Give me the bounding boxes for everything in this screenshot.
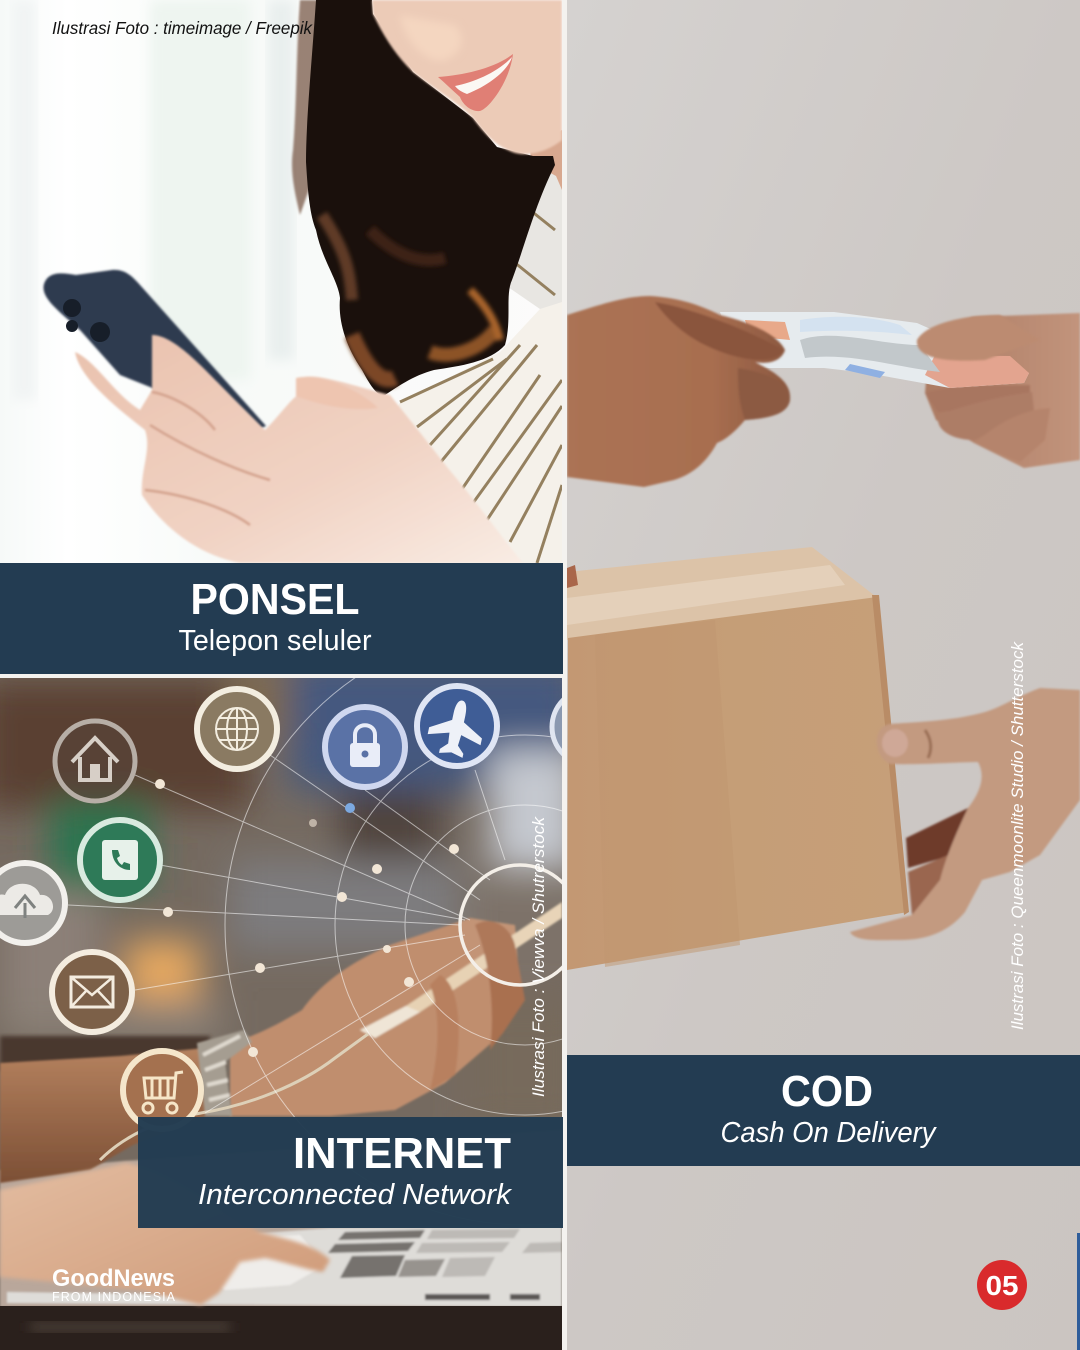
page number badge: 05 xyxy=(986,1270,1018,1301)
wall background xyxy=(567,0,1080,1350)
banknote xyxy=(720,312,1029,388)
icon: home xyxy=(55,721,135,801)
icon: airplane xyxy=(417,686,497,766)
icon: envelope xyxy=(52,952,132,1032)
subheading: telepon seluler: Telepon seluler xyxy=(178,625,372,657)
edge accent xyxy=(1077,1233,1080,1350)
icon: lock xyxy=(325,707,405,787)
table bottom xyxy=(0,1306,562,1350)
subheading: interconnected network: Interconnected Network xyxy=(198,1179,513,1211)
face xyxy=(372,0,562,154)
network lines and rings xyxy=(68,678,562,1117)
panel: ponsel photo xyxy=(0,0,562,563)
icon: shopping cart xyxy=(123,1051,201,1129)
hair xyxy=(306,0,555,395)
icon: phonebook xyxy=(80,820,160,900)
hair wisps xyxy=(292,0,318,215)
icon: globe xyxy=(197,689,277,769)
right thumb on money xyxy=(916,314,1003,362)
page number badge xyxy=(977,1260,1027,1310)
blurred photo background xyxy=(0,678,562,1306)
label: ponsel xyxy=(0,563,563,674)
panel: cod photo xyxy=(567,0,1080,1350)
icon: cloud upload xyxy=(0,863,65,943)
lower hand xyxy=(0,1163,330,1305)
nose shadow xyxy=(406,20,458,57)
photo background: bright window xyxy=(0,0,562,563)
watch xyxy=(197,1030,252,1116)
forearm left xyxy=(0,1048,215,1183)
photo credit: cod: Ilustrasi Foto : Queenmoonlite Studio / Shutterstock xyxy=(1008,641,1027,1030)
photo credit: internet: Ilustrasi Foto : Viewva / Shutrerstock xyxy=(529,815,548,1097)
left hand with money xyxy=(567,296,790,487)
label: cod xyxy=(567,1055,1080,1166)
photo credit: ponsel: Ilustrasi Foto : timeimage / Freepik xyxy=(52,18,313,38)
phone xyxy=(43,270,266,438)
label: internet xyxy=(138,1117,563,1228)
right hand palm with money xyxy=(925,313,1080,468)
shirt xyxy=(398,173,562,563)
hand holding phone xyxy=(230,902,562,1116)
neck xyxy=(530,130,562,190)
cardboard box xyxy=(567,547,909,970)
heading: cod: COD xyxy=(781,1067,873,1116)
smile xyxy=(438,54,513,111)
partial icon at right edge xyxy=(550,698,562,756)
heading: internet: INTERNET xyxy=(293,1129,511,1178)
logo: goodnews from indonesia xyxy=(52,1265,176,1304)
dark band behind forearm xyxy=(0,1036,210,1071)
logo: goodnews from indonesia: FROM INDONESIA xyxy=(52,1290,176,1304)
hands xyxy=(75,335,523,563)
earphone cable xyxy=(100,1034,368,1160)
panel: internet photo xyxy=(0,678,562,1350)
lower right hand with box xyxy=(850,688,1080,940)
heading: ponsel: PONSEL xyxy=(190,575,360,624)
logo: goodnews from indonesia: GoodNews xyxy=(52,1265,175,1292)
subheading: cash on delivery: Cash On Delivery xyxy=(720,1117,937,1149)
laptop xyxy=(0,1159,562,1306)
